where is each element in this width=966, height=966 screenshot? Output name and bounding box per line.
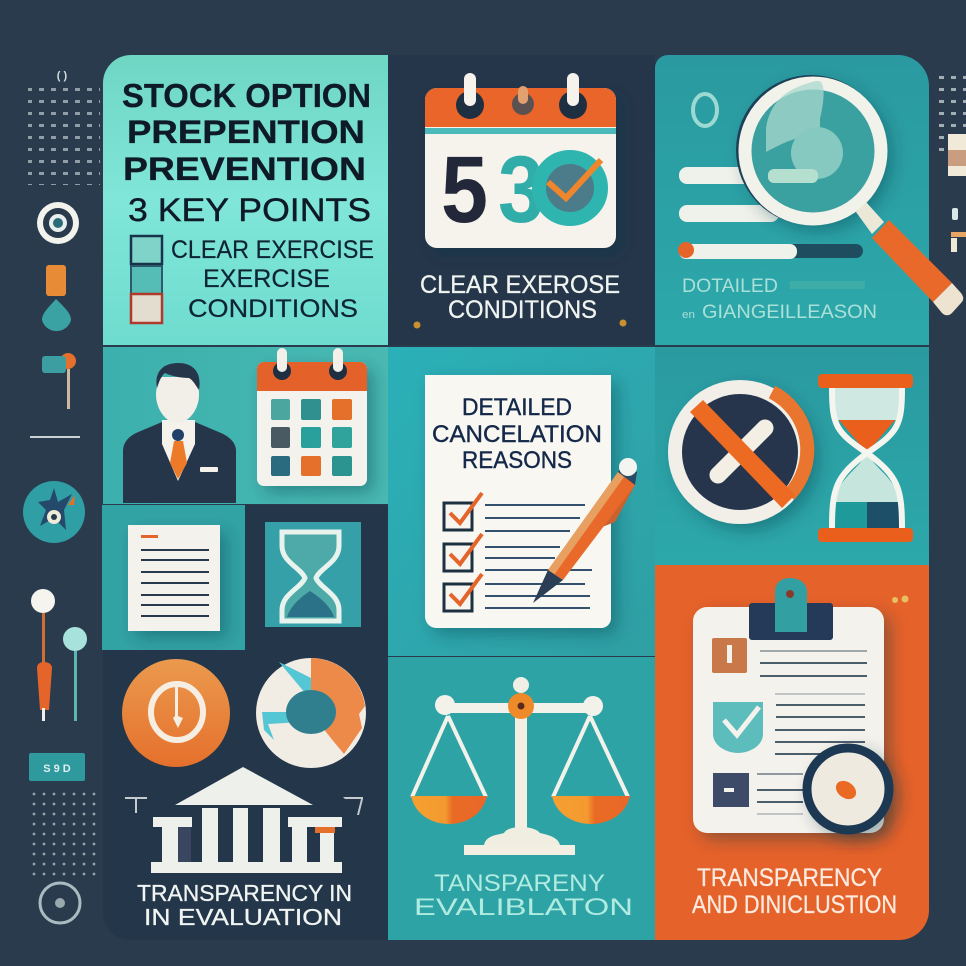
panel: cancellation reasons bbox=[388, 347, 655, 656]
small gold dots bbox=[892, 596, 908, 603]
caption: transparency in evaluation: IN EVALUATION bbox=[144, 904, 342, 930]
heading: title text: STOCK OPTION bbox=[122, 77, 371, 114]
panel: scales bbox=[388, 657, 655, 940]
left sidebar decorations: ( ) bbox=[57, 70, 68, 82]
panel: transparency clipboard bbox=[655, 565, 929, 940]
panel: document card bbox=[102, 505, 245, 650]
caption: transparency and disclosure: TRANSPARENCY bbox=[697, 864, 882, 892]
caption: clear exercise conditions: CLEAR EXEROSE bbox=[420, 271, 620, 299]
caption: detailed reason bbox=[682, 276, 877, 323]
panel: hourglass card bbox=[245, 505, 388, 650]
icon: calendar grid bbox=[257, 348, 367, 486]
panel: magnifier bbox=[655, 55, 963, 345]
checkbox list: EXERCISE bbox=[203, 265, 330, 293]
icon: small magnifier bbox=[807, 748, 889, 830]
heading: detailed cancelation reasons: DETAILED bbox=[462, 394, 572, 421]
icon: calendar with check: 3 bbox=[498, 137, 544, 243]
heading: title text: PREPENTION bbox=[127, 114, 365, 150]
checkbox list: CLEAR EXERCISE bbox=[171, 236, 374, 264]
icon: calendar with check: 5 bbox=[441, 137, 488, 243]
icon: small ring bbox=[693, 94, 717, 126]
caption: clear exercise conditions bbox=[420, 271, 620, 324]
panel: calendar bbox=[388, 55, 655, 345]
icon: bank building bbox=[125, 767, 363, 873]
heading: detailed cancelation reasons: CANCELATION bbox=[432, 421, 602, 448]
icon: hourglass outline bbox=[282, 532, 339, 621]
icon: document bbox=[128, 525, 220, 631]
heading: title text bbox=[122, 77, 371, 187]
panel: person and schedule bbox=[103, 347, 388, 504]
caption: clear exercise conditions: CONDITIONS bbox=[448, 296, 597, 324]
panel: title bbox=[103, 55, 388, 345]
caption: transparency and disclosure bbox=[692, 864, 897, 919]
panel: cancel and hourglass bbox=[655, 347, 929, 565]
right sidebar decorations bbox=[936, 70, 966, 252]
checkbox list bbox=[131, 236, 374, 323]
icon: hourglass bbox=[818, 374, 913, 542]
heading: detailed cancelation reasons: REASONS bbox=[462, 447, 572, 474]
icon: checklist paper bbox=[425, 375, 611, 628]
list bars bbox=[678, 167, 863, 259]
caption: transparency evaluation: EVALIBLATON bbox=[414, 894, 633, 921]
icon: segmented ring bbox=[256, 658, 366, 768]
caption: detailed reason: GIANGEILLEASON bbox=[702, 302, 877, 323]
panel: institution bbox=[103, 650, 388, 940]
icon: calendar with check bbox=[425, 73, 616, 248]
icon: orange dial bbox=[122, 659, 230, 767]
caption: transparency and disclosure: AND DINICLUSTION bbox=[692, 891, 897, 919]
icon: prohibition sign bbox=[675, 387, 807, 517]
caption: transparency evaluation bbox=[414, 870, 633, 921]
caption: detailed reason: DOTAILED bbox=[682, 276, 778, 297]
icon: businessperson bbox=[123, 363, 236, 503]
icon: balance scales bbox=[411, 677, 630, 855]
caption: detailed reason: en bbox=[682, 309, 695, 321]
subheading: key points: 3 KEY POINTS bbox=[128, 192, 371, 228]
icon: clipboard bbox=[693, 578, 884, 833]
heading: title text: PREVENTION bbox=[123, 151, 366, 187]
heading: detailed cancelation reasons bbox=[432, 394, 602, 474]
caption: transparency in evaluation: TRANSPARENCY IN bbox=[137, 880, 352, 906]
caption: transparency evaluation: TANSPARENY bbox=[434, 870, 605, 897]
checkbox list: CONDITIONS bbox=[188, 295, 358, 323]
icon: pen bbox=[533, 458, 637, 603]
left sidebar decorations: S 9 D bbox=[43, 763, 71, 775]
icon: magnifying glass bbox=[736, 75, 963, 315]
left sidebar decorations bbox=[23, 70, 100, 923]
caption: transparency in evaluation bbox=[137, 880, 352, 930]
gold dots bbox=[414, 320, 626, 328]
